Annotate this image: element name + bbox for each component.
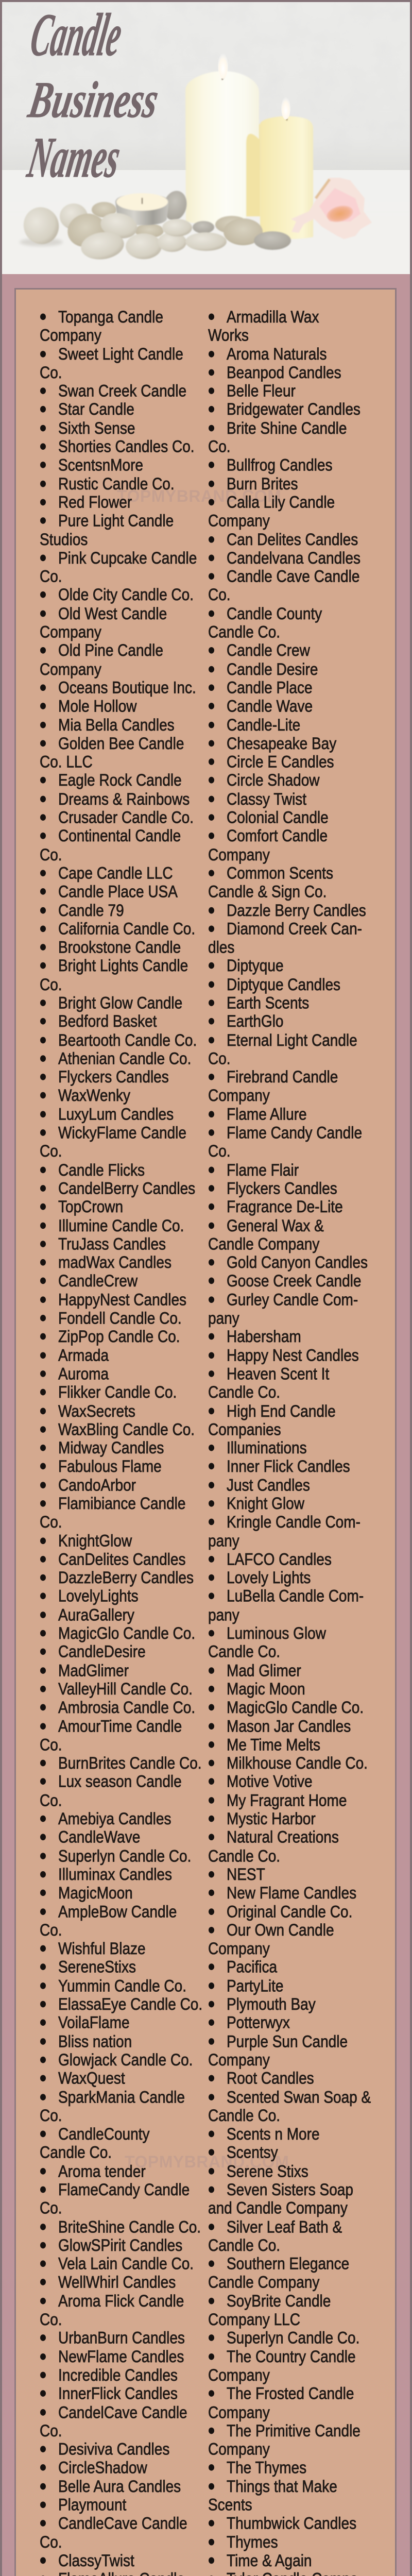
names list: left column: CandleWave <box>58 1828 140 1846</box>
names list: left column: TruJass Candles <box>58 1235 166 1253</box>
names list: left column: ScentsnMore <box>58 456 143 474</box>
names list: left column: Shorties Candles Co. <box>58 437 195 456</box>
names list: left column: ClassyTwist <box>58 2551 134 2570</box>
title: Business <box>24 71 163 128</box>
names list: right column: Circle Shadow <box>227 771 320 789</box>
names list: right column: PartyLite <box>227 1976 283 1995</box>
names list: right column: Habersham <box>227 1328 301 1346</box>
names list: left column: DazzleBerry Candles <box>58 1568 194 1587</box>
icon: sea shell <box>291 178 372 239</box>
names list: right column: Can Delites Candles <box>227 530 358 549</box>
names list: left column: Co. <box>40 567 62 586</box>
names list: right column: Luminous Glow <box>227 1624 326 1642</box>
names list: right column: My Fragrant Home <box>227 1791 347 1809</box>
watermark: TOPMYBRAND.COM <box>117 487 281 505</box>
stones front <box>64 210 291 262</box>
names list: right column: LuBella Candle Com- <box>227 1587 364 1605</box>
header photo: candles and stones <box>2 2 410 274</box>
names list: left column: BurnBrites Candle Co. <box>58 1754 202 1772</box>
names list: right column: Goose Creek Candle <box>227 1272 361 1290</box>
tealight <box>115 193 169 225</box>
names list: left column: Lux season Candle <box>58 1772 182 1791</box>
names list: left column: Co. <box>40 2199 62 2217</box>
names list: right column: Candle County <box>227 604 322 623</box>
names list: left column: CandoArbor <box>58 1476 136 1494</box>
names list: right column: Company <box>208 2440 270 2459</box>
names list: right column: Candle Co. <box>208 623 280 641</box>
names list: right column: Scents <box>208 2496 252 2514</box>
names list: right column: Root Candles <box>227 2069 314 2088</box>
names list: right column: Magic Moon <box>227 1680 305 1698</box>
names list: left column: Olde City Candle Co. <box>58 586 194 604</box>
flames <box>139 53 290 210</box>
names list: right column <box>208 308 371 2576</box>
names list: left column: WickyFlame Candle <box>58 1124 186 1142</box>
names list: right column: Aroma Naturals <box>227 345 327 363</box>
names list: left column: Star Candle <box>58 400 134 419</box>
names list: right column: Scented Swan Soap & <box>227 2088 371 2106</box>
names list: right column: Heaven Scent It <box>227 1365 329 1383</box>
names list: left column: Illumine Candle Co. <box>58 1216 184 1234</box>
names list: left column: ZipPop Candle Co. <box>58 1328 180 1346</box>
names list: left column: Bliss nation <box>58 2032 132 2050</box>
names list: right column: Inner Flick Candles <box>227 1457 350 1476</box>
candle: tall pillar <box>185 70 261 225</box>
names list: left column: madWax Candles <box>58 1253 171 1272</box>
names list: left column: Glowjack Candle Co. <box>58 2050 193 2069</box>
names list: left column: Co. <box>40 2533 62 2551</box>
names list: right column: Dazzle Berry Candles <box>227 901 366 919</box>
names list: right column: Burn Brites <box>227 474 298 493</box>
names list: left column: Bright Glow Candle <box>58 994 182 1012</box>
names list: left column: MagicGlo Candle Co. <box>58 1624 195 1642</box>
names list: left column: AuraGallery <box>58 1605 134 1624</box>
names list: right column: Lovely Lights <box>227 1568 311 1587</box>
names list: right column: pany <box>208 1309 239 1327</box>
names list: left column: Co. <box>40 2106 62 2125</box>
names list: left column: Co. <box>40 363 62 382</box>
names list: right column: Seven Sisters Soap <box>227 2180 353 2199</box>
names list: right column: Candle Co. <box>208 1846 280 1865</box>
names list: right column: Co. <box>208 1142 231 1160</box>
names list: right column: Happy Nest Candles <box>227 1346 359 1364</box>
names list: right column: Pacifica <box>227 1958 277 1976</box>
names list: right column: pany <box>208 1605 239 1624</box>
names list: right column: Chesapeake Bay <box>227 734 336 752</box>
table <box>2 170 410 274</box>
names list: right column: General Wax & <box>227 1216 324 1234</box>
names list: right column: Scents n More <box>227 2125 320 2143</box>
names list: left column: Desiviva Candles <box>58 2440 169 2459</box>
names list: left column: FlameCandy Candle <box>58 2180 190 2199</box>
names list: right column: Bridgewater Candles <box>227 400 360 419</box>
names list: right column: Comfort Candle <box>227 827 328 845</box>
names list: left column: WellWhirl Candles <box>58 2273 176 2292</box>
names list: right column: Company <box>208 2366 270 2384</box>
names list: right column: Company <box>208 1087 270 1105</box>
names list: left column: AmourTime Candle <box>58 1717 182 1735</box>
names list: left column: Co. <box>40 2421 62 2440</box>
names list: left column: Old West Candle <box>58 604 167 623</box>
names list: right column: Mystic Harbor <box>227 1809 316 1828</box>
names list: left column: KnightGlow <box>58 1531 132 1550</box>
names list: right column: Common Scents <box>227 864 333 882</box>
names list: right column: Armadilla Wax <box>227 308 319 326</box>
names list: left column: InnerFlick Candles <box>58 2384 178 2403</box>
names list: left column: Company <box>40 623 101 641</box>
names list: left column: Aroma tender <box>58 2162 146 2180</box>
names list: left column: CandelBerry Candles <box>58 1179 195 1197</box>
names list: right column: The Thymes <box>227 2459 306 2477</box>
names list: left column: Candle 79 <box>58 901 124 919</box>
names list: left column: ValleyHill Candle Co. <box>58 1680 193 1698</box>
names list: left column: Red Flower <box>58 493 132 512</box>
names list: left column: Illuminax Candles <box>58 1865 172 1884</box>
names list: left column: Armada <box>58 1346 109 1364</box>
names list: left column: Eagle Rock Candle <box>58 771 182 789</box>
names list: right column: Flame Flair <box>227 1161 299 1179</box>
names list: right column: Co. <box>208 437 231 456</box>
names list: left column: TopCrown <box>58 1198 123 1216</box>
names list: right column: Works <box>208 326 249 345</box>
names list: right column: Things that Make <box>227 2477 337 2496</box>
names list: left column: Co. <box>40 1921 62 1939</box>
names list: right column: Candle Co. <box>208 1383 280 1401</box>
names list: left column: Crusader Candle Co. <box>58 808 194 826</box>
names list: right column: Me Time Melts <box>227 1735 320 1754</box>
names list: right column: pany <box>208 1531 239 1550</box>
names list: right column: Flyckers Candles <box>227 1179 337 1197</box>
names list: left column: CandleCave Candle <box>58 2514 187 2533</box>
names list: left column: Flyckers Candles <box>58 1068 169 1086</box>
names list: left column: Superlyn Candle Co. <box>58 1846 191 1865</box>
names list: left column: VoilaFlame <box>58 2013 130 2032</box>
names list: left column: Rustic Candle Co. <box>58 474 175 493</box>
title <box>23 1 163 190</box>
stones behind <box>19 189 190 249</box>
names list: right column: Silver Leaf Bath & <box>227 2217 342 2236</box>
names list: left column: Mole Hollow <box>58 697 137 715</box>
names list: left column: Belle Aura Candles <box>58 2477 181 2496</box>
names list: left column: CandleCounty <box>58 2125 149 2143</box>
names list: right column: Natural Creations <box>227 1828 339 1846</box>
names list: right column: Original Candle Co. <box>227 1902 352 1921</box>
names list: right column: Beanpod Candles <box>227 363 341 382</box>
names list: left column: Studios <box>40 530 88 549</box>
names list: left column: California Candle Co. <box>58 920 195 938</box>
names list: left column: Beartooth Candle Co. <box>58 1031 197 1049</box>
names list: right column: Companies <box>208 1420 281 1438</box>
names list: left column: CandleDesire <box>58 1642 146 1661</box>
names list: right column: Company <box>208 845 270 863</box>
names list: right column: Candle Desire <box>227 660 318 678</box>
title: Candle <box>26 2 127 69</box>
names list: left column: WaxSecrets <box>58 1401 135 1420</box>
names list: left column: Aroma Flick Candle <box>58 2292 184 2310</box>
names list: right column: Flame Allure <box>227 1105 307 1123</box>
names list: left column: Oceans Boutique Inc. <box>58 679 196 697</box>
names list: right column: Kringle Candle Com- <box>227 1513 360 1531</box>
names list: right column: Mad Glimer <box>227 1661 301 1680</box>
names list: right column: Diptyque <box>227 957 284 975</box>
names list: left column: SparkMania Candle <box>58 2088 185 2106</box>
names list: left column: LuxyLum Candles <box>58 1105 174 1123</box>
names list: left column: Fondell Candle Co. <box>58 1309 182 1327</box>
names list: left column: Company <box>40 326 101 345</box>
names list: left column: CircleShadow <box>58 2459 147 2477</box>
names list: right column: Candle Company <box>208 2273 319 2292</box>
names list: right column: EarthGlo <box>227 1012 283 1030</box>
names list: right column: The Primitive Candle <box>227 2421 360 2440</box>
names list: left column: Bedford Basket <box>58 1012 157 1030</box>
names list: left column: Sixth Sense <box>58 419 135 437</box>
names list: left column: Co. <box>40 1735 62 1754</box>
names list: left column: Candle Place USA <box>58 883 178 901</box>
names list: right column: Potterwyx <box>227 2013 290 2032</box>
names list: right column: Scentsy <box>227 2143 278 2162</box>
names list: right column: Just Candles <box>227 1476 310 1494</box>
names list: right column: Milkhouse Candle Co. <box>227 1754 368 1772</box>
names list: left column: UrbanBurn Candles <box>58 2329 185 2347</box>
names list: right column: Gurley Candle Com- <box>227 1291 358 1309</box>
names list: left column: BriteShine Candle Co. <box>58 2217 201 2236</box>
names list: left column: Flikker Candle Co. <box>58 1383 177 1401</box>
title: Names <box>23 126 125 190</box>
names list: left column: Yummin Candle Co. <box>58 1976 186 1995</box>
names list: right column: Our Own Candle <box>227 1921 334 1939</box>
names list: left column: WaxWenky <box>58 1087 130 1105</box>
names list: left column: Co. <box>40 845 62 863</box>
names list: left column: Swan Creek Candle <box>58 382 186 400</box>
names list: right column: LAFCO Candles <box>227 1550 332 1568</box>
names list: left column: ElassaEye Candle Co. <box>58 1995 202 2013</box>
names list: right column: Candle Cave Candle <box>227 567 359 586</box>
names list: right column: Diptyque Candles <box>227 975 340 993</box>
names list: left column: AmpleBow Candle <box>58 1902 177 1921</box>
names list: left column: GlowSPirit Candles <box>58 2236 182 2255</box>
names list: right column: Diamond Creek Can- <box>227 920 362 938</box>
names list: right column: Mason Jar Candles <box>227 1717 351 1735</box>
names list: right column: Company <box>208 2403 270 2421</box>
names list: right column: Candle Co. <box>208 2236 280 2255</box>
names list: right column: Motive Votive <box>227 1772 313 1791</box>
names list: right column: Colonial Candle <box>227 808 329 826</box>
names list: right column: Flame Candy Candle <box>227 1124 362 1142</box>
names list: left column: SereneStixs <box>58 1958 136 1976</box>
names list: left column: Pink Cupcake Candle <box>58 549 197 567</box>
names list: left column: Cape Candle LLC <box>58 864 173 882</box>
names list: left column: Old Pine Candle <box>58 641 163 659</box>
names list: left column: Candle Flicks <box>58 1161 145 1179</box>
names list: right column: Thumbwick Candles <box>227 2514 356 2533</box>
names list: left column: CanDelites Candles <box>58 1550 185 1568</box>
names list: left column: Incredible Candles <box>58 2366 178 2384</box>
names list: left column: Athenian Candle Co. <box>58 1049 191 1067</box>
names list: left column: Co. <box>40 2310 62 2329</box>
names list: left column: Wishful Blaze <box>58 1939 146 1958</box>
names list: left column: Brookstone Candle <box>58 938 181 956</box>
names list: right column: Company LLC <box>208 2310 300 2329</box>
names list: left column: Flamibiance Candle <box>58 1494 185 1513</box>
names list: right column: Company <box>208 1939 270 1958</box>
names list: right column: Plymouth Bay <box>227 1995 316 2013</box>
names list: right column: Circle E Candles <box>227 753 334 771</box>
names list: left column: Bright Lights Candle <box>58 957 188 975</box>
names list: left column: Amebiya Candles <box>58 1809 171 1828</box>
names list: right column: Candle Co. <box>208 2106 280 2125</box>
names list: right column: dles <box>208 938 234 956</box>
names list: left column: Candle Co. <box>40 2143 112 2162</box>
names list: right column: Eternal Light Candle <box>227 1031 357 1049</box>
names list: right column: SoyBrite Candle <box>227 2292 331 2310</box>
watermark: TOPMYBRAND.COM <box>125 2153 289 2171</box>
names list: right column: The Frosted Candle <box>227 2384 354 2403</box>
names list: right column: Company <box>208 512 270 530</box>
names list: right column: Candle Co. <box>208 1642 280 1661</box>
names list: left column: CandleCrew <box>58 1272 138 1290</box>
names list: left column: Co. <box>40 1791 62 1809</box>
names list: right column: Belle Fleur <box>227 382 296 400</box>
names list: left column: HappyNest Candles <box>58 1291 186 1309</box>
names list: right column: New Flame Candles <box>227 1884 356 1902</box>
names list: right column: Earth Scents <box>227 994 309 1012</box>
names list: right column: Time & Again <box>227 2551 312 2570</box>
names list: right column: Co. <box>208 1049 231 1067</box>
names list: left column: Vela Lain Candle Co. <box>58 2255 194 2273</box>
names list: right column: Candle Crew <box>227 641 310 659</box>
names list: right column: and Candle Company <box>208 2199 348 2217</box>
names list: left column: Continental Candle <box>58 827 181 845</box>
names list: left column: MadGlimer <box>58 1661 129 1680</box>
names list: right column: Calla Lily Candle <box>227 493 335 512</box>
names list: right column: MagicGlo Candle Co. <box>227 1698 364 1717</box>
names list: right column: Firebrand Candle <box>227 1068 338 1086</box>
names list: right column: Brite Shine Candle <box>227 419 347 437</box>
names list: left column: NewFlame Candles <box>58 2347 184 2366</box>
names list: left column: Co. <box>40 975 62 993</box>
names list: right column: Company <box>208 2050 270 2069</box>
names list: right column: Knight Glow <box>227 1494 304 1513</box>
names list: left column: Midway Candles <box>58 1438 164 1457</box>
names list: left column: Sweet Light Candle <box>58 345 183 363</box>
names list: left column: Topanga Candle <box>58 308 163 326</box>
names list: right column: Bullfrog Candles <box>227 456 332 474</box>
names list: left column: CandelCave Candle <box>58 2403 187 2421</box>
names list: left column: Co. <box>40 1142 62 1160</box>
names list: left column: Ambrosia Candle Co. <box>58 1698 195 1717</box>
names list: left column: Golden Bee Candle <box>58 734 184 752</box>
names list: right column: Candle & Sign Co. <box>208 883 327 901</box>
candle: short pillar <box>260 114 313 239</box>
names list: right column: Illuminations <box>227 1438 307 1457</box>
names list: left column: WaxQuest <box>58 2069 125 2088</box>
names list: left column: MagicMoon <box>58 1884 133 1902</box>
names list: left column: Pure Light Candle <box>58 512 174 530</box>
names list: right column: Superlyn Candle Co. <box>227 2329 359 2347</box>
wall <box>2 2 410 171</box>
names list: right column: Candle Wave <box>227 697 313 715</box>
names list: right column: NEST <box>227 1865 265 1884</box>
names list: left column: WaxBling Candle Co. <box>58 1420 195 1438</box>
names list: left column: Fabulous Flame <box>58 1457 162 1476</box>
names list: right column: Gold Canyon Candles <box>227 1253 368 1272</box>
names list: left column: Playmount <box>58 2496 126 2514</box>
names list: left column: Auroma <box>58 1365 109 1383</box>
names list: right column: Fragrance De-Lite <box>227 1198 343 1216</box>
names list: right column: Serene Stixs <box>227 2162 308 2180</box>
names list: left column: LovelyLights <box>58 1587 139 1605</box>
names list: left column: Co. LLC <box>40 753 93 771</box>
names list: left column: Dreams & Rainbows <box>58 790 190 808</box>
names list: right column: Candle-Lite <box>227 716 300 734</box>
names list: right column: The Country Candle <box>227 2347 356 2366</box>
names list: left column: Co. <box>40 1513 62 1531</box>
names list: left column <box>40 308 202 2576</box>
names list: right column: Candelvana Candles <box>227 549 360 567</box>
names list: right column: Co. <box>208 586 231 604</box>
names list: left column: Company <box>40 660 101 678</box>
names list: right column: Purple Sun Candle <box>227 2032 348 2050</box>
names list: right column: Thymes <box>227 2533 278 2551</box>
names list: right column: High End Candle <box>227 1401 336 1420</box>
names list: right column: Southern Elegance <box>227 2255 349 2273</box>
names list: right column: Candle Place <box>227 679 313 697</box>
names list: right column: Classy Twist <box>227 790 306 808</box>
names list: left column: Mia Bella Candles <box>58 716 175 734</box>
names list: right column: Candle Company <box>208 1235 319 1253</box>
